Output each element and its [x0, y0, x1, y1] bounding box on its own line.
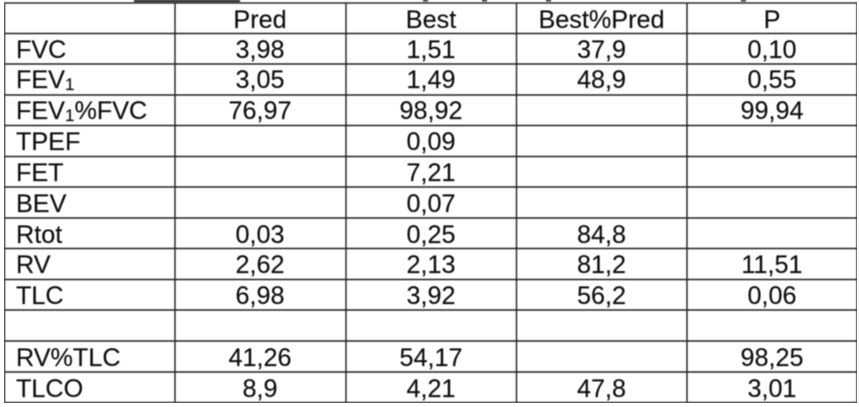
row: TLCO — [16, 375, 797, 403]
row: RV — [16, 251, 803, 279]
row: TLC: TLC — [16, 282, 64, 310]
header row: Best%Pred — [538, 6, 664, 34]
row: FET — [16, 159, 456, 187]
row: RV%TLC — [16, 344, 804, 372]
row: FEV1%FVC: 98,92 — [399, 97, 463, 125]
row: FEV1%FVC: 76,97 — [228, 97, 292, 125]
row: TLC: 3,92 — [406, 282, 456, 310]
row: FEV1: 3,05 — [235, 66, 285, 94]
row: FEV1: FEV — [16, 66, 65, 94]
row: TLC: 6,98 — [235, 282, 285, 310]
row: FVC: 3,98 — [235, 36, 285, 64]
row: TLC: 56,2 — [577, 282, 626, 310]
row: FEV1: 1,49 — [406, 66, 456, 94]
row: FEV1%FVC — [16, 97, 804, 125]
row: TLC — [16, 282, 797, 310]
header row: P — [764, 6, 780, 34]
row: RV: 11,51 — [741, 251, 803, 279]
row: FVC: 1,51 — [406, 36, 456, 64]
row: Rtot: 0,03 — [235, 221, 285, 249]
row: TLCO: 8,9 — [242, 375, 278, 403]
row: RV%TLC: 41,26 — [228, 344, 292, 372]
row: BEV — [16, 190, 456, 218]
row: Rtot: 84,8 — [577, 221, 626, 249]
row: Rtot — [16, 221, 626, 249]
row: RV: 81,2 — [577, 251, 626, 279]
row: RV: RV — [16, 251, 51, 279]
row: TLCO: TLCO — [16, 375, 83, 403]
cropped caption remnant at top edge — [134, 0, 746, 2]
row: FEV1: 48,9 — [577, 66, 626, 94]
row: FEV1%FVC: 99,94 — [740, 97, 804, 125]
row: TPEF — [16, 128, 456, 156]
header row: Best — [406, 6, 456, 34]
row: TPEF: 0,09 — [406, 128, 456, 156]
row: FEV1: 0,55 — [747, 66, 797, 94]
row: TLCO: 47,8 — [577, 375, 626, 403]
row: RV: 2,13 — [406, 251, 456, 279]
header row: Pred — [233, 6, 287, 34]
row: Rtot: 0,25 — [406, 221, 456, 249]
row: FEV1%FVC: 1 — [65, 106, 74, 125]
row: RV%TLC: RV%TLC — [16, 344, 121, 372]
row: BEV: BEV — [16, 190, 67, 218]
row: TLC: 0,06 — [747, 282, 797, 310]
row: BEV: 0,07 — [406, 190, 456, 218]
row: FVC: 0,10 — [747, 36, 797, 64]
row: FEV1: 1 — [65, 75, 74, 94]
row: FEV1 — [16, 66, 797, 94]
header row — [233, 6, 780, 34]
row: FET: 7,21 — [406, 159, 456, 187]
row: FET: FET — [16, 159, 64, 187]
row: TLCO: 3,01 — [747, 375, 797, 403]
row: FVC: FVC — [16, 36, 66, 64]
row: TPEF: TPEF — [16, 128, 80, 156]
row: RV: 2,62 — [235, 251, 285, 279]
row: FVC — [16, 36, 797, 64]
row: RV%TLC: 54,17 — [399, 344, 463, 372]
row: Rtot: Rtot — [16, 221, 62, 249]
row: TLCO: 4,21 — [406, 375, 456, 403]
row: FEV1%FVC: %FVC — [74, 97, 147, 125]
row: FEV1%FVC: FEV — [16, 97, 65, 125]
row: RV%TLC: 98,25 — [740, 344, 804, 372]
row: FVC: 37,9 — [577, 36, 626, 64]
